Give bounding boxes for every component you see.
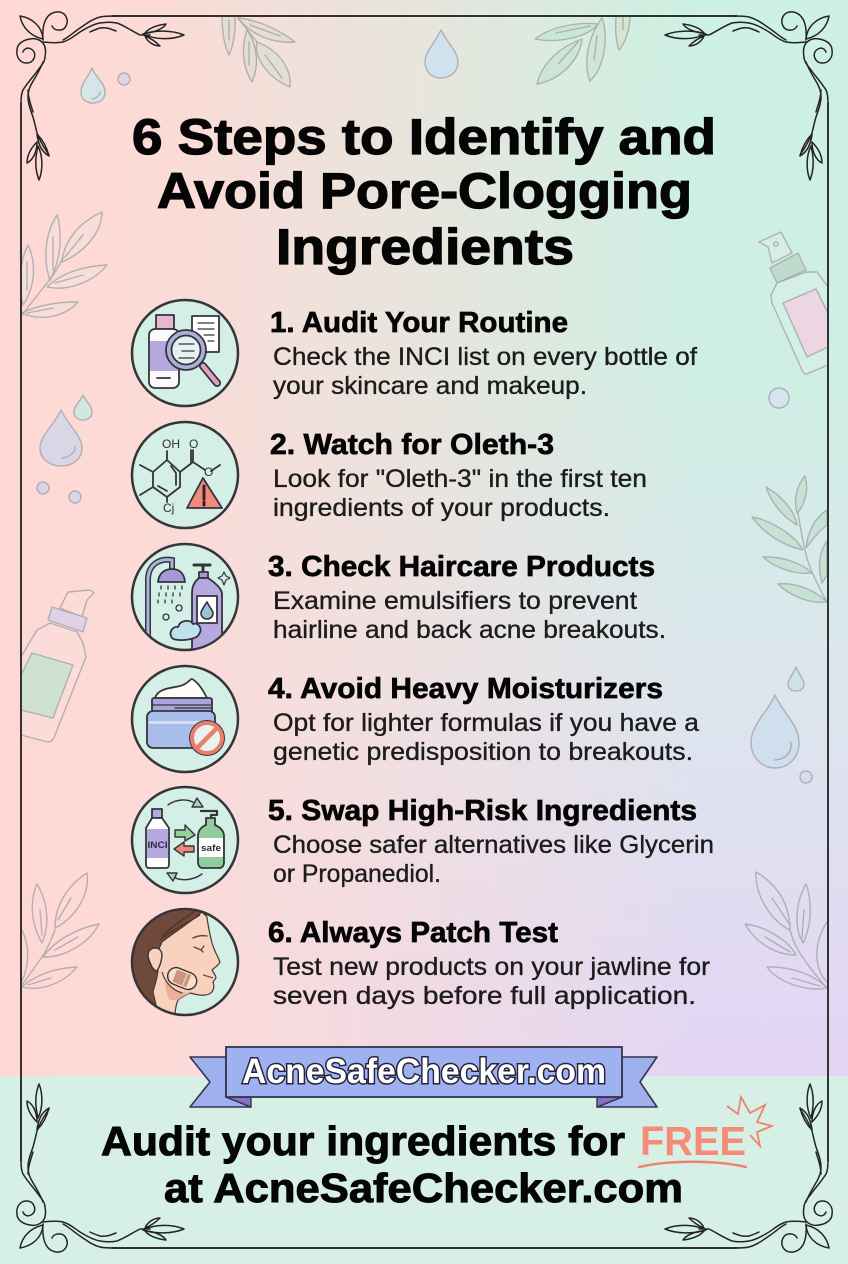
right bottle bbox=[759, 232, 828, 374]
decorative background illustrations bbox=[20, 16, 828, 989]
right lower droplets bbox=[751, 667, 812, 783]
step 1 bbox=[132, 300, 697, 406]
step 4 bbox=[132, 666, 699, 772]
title: Ingredients bbox=[276, 219, 574, 275]
icon: molecule with warning bbox=[132, 422, 238, 528]
icon: swap ingredients bbox=[132, 787, 238, 893]
icon: cream jar with ban sign bbox=[132, 666, 238, 772]
step 6 text: Test new products on your jawline for bbox=[273, 953, 710, 981]
icon: bottle and magnifier bbox=[132, 300, 238, 406]
title: 6 Steps to Identify and bbox=[132, 109, 716, 165]
step 1 text bbox=[273, 343, 697, 400]
top left droplet bbox=[81, 68, 105, 103]
right lower leaf sprig bbox=[745, 872, 827, 989]
corner ornament: bottom left bbox=[17, 1084, 184, 1252]
top right leaf sprig bbox=[535, 16, 630, 84]
step 5 text bbox=[273, 831, 714, 888]
icon: swap ingredients: INCI bbox=[148, 840, 168, 850]
step 2 bbox=[132, 422, 647, 528]
icon: molecule with warning: OH bbox=[162, 437, 180, 451]
ribbon banner bbox=[190, 1047, 657, 1107]
step 4 text bbox=[273, 709, 699, 766]
icon: face with patch bbox=[130, 905, 238, 1020]
top left bubble bbox=[118, 73, 130, 85]
footer band bbox=[0, 1076, 848, 1264]
icon: molecule with warning: O bbox=[204, 465, 213, 479]
right middle leaf sprig bbox=[752, 476, 827, 602]
corner ornament: top left bbox=[17, 12, 184, 180]
cta line 2: at AcneSafeChecker.com bbox=[164, 1165, 683, 1211]
step 3 text: Examine emulsifiers to prevent bbox=[273, 587, 637, 615]
top droplet bbox=[425, 30, 458, 78]
icon: molecule with warning: Cj bbox=[163, 501, 174, 515]
step 5 heading: 5. Swap High-Risk Ingredients bbox=[268, 795, 697, 827]
step 4 text: genetic predisposition to breakouts. bbox=[273, 738, 693, 766]
top centre-left leaf sprig bbox=[222, 16, 295, 87]
step 6 heading: 6. Always Patch Test bbox=[268, 917, 558, 949]
step 1 text: your skincare and makeup. bbox=[273, 372, 587, 400]
step 2 text bbox=[273, 465, 647, 522]
left bottle bbox=[21, 590, 94, 742]
step 5 bbox=[132, 787, 714, 893]
step 2 text: ingredients of your products. bbox=[273, 494, 610, 522]
step 5 text: Choose safer alternatives like Glycerin bbox=[273, 831, 714, 859]
free highlight: FREE bbox=[640, 1118, 746, 1164]
step 2 text: Look for "Oleth-3" in the first ten bbox=[273, 465, 647, 493]
step 4 text: Opt for lighter formulas if you have a bbox=[273, 709, 699, 737]
icon: swap ingredients: safe bbox=[201, 843, 221, 854]
step 3 bbox=[132, 544, 666, 650]
title: Avoid Pore-Clogging bbox=[157, 163, 692, 219]
step 4 heading: 4. Avoid Heavy Moisturizers bbox=[268, 673, 663, 705]
icon: molecule with warning: O bbox=[189, 437, 198, 451]
step 6 bbox=[130, 905, 710, 1020]
ribbon banner: AcneSafeChecker.com bbox=[242, 1052, 606, 1091]
step 3 text: hairline and back acne breakouts. bbox=[273, 616, 666, 644]
left lower leaf sprig bbox=[21, 873, 99, 988]
step 1 text: Check the INCI list on every bottle of bbox=[273, 343, 697, 371]
step 6 text bbox=[273, 953, 710, 1010]
left droplets and bubbles bbox=[37, 395, 92, 503]
corner ornament: bottom right bbox=[665, 1084, 832, 1252]
step 5 text: or Propanediol. bbox=[273, 860, 441, 888]
icon: shower and bottle bbox=[132, 544, 238, 650]
corner ornament: top right bbox=[665, 12, 832, 180]
step 2 heading: 2. Watch for Oleth-3 bbox=[270, 429, 554, 461]
step 6 text: seven days before full application. bbox=[273, 982, 696, 1010]
call to action bbox=[101, 1097, 772, 1211]
title bbox=[132, 109, 716, 275]
step 3 heading: 3. Check Haircare Products bbox=[268, 551, 655, 583]
step 1 heading: 1. Audit Your Routine bbox=[270, 307, 568, 339]
step 3 text bbox=[273, 587, 666, 644]
free highlight bbox=[639, 1097, 772, 1167]
left upper leaf sprig bbox=[20, 212, 107, 317]
right bubble bbox=[769, 388, 789, 408]
cta line 1: Audit your ingredients for bbox=[101, 1118, 625, 1164]
